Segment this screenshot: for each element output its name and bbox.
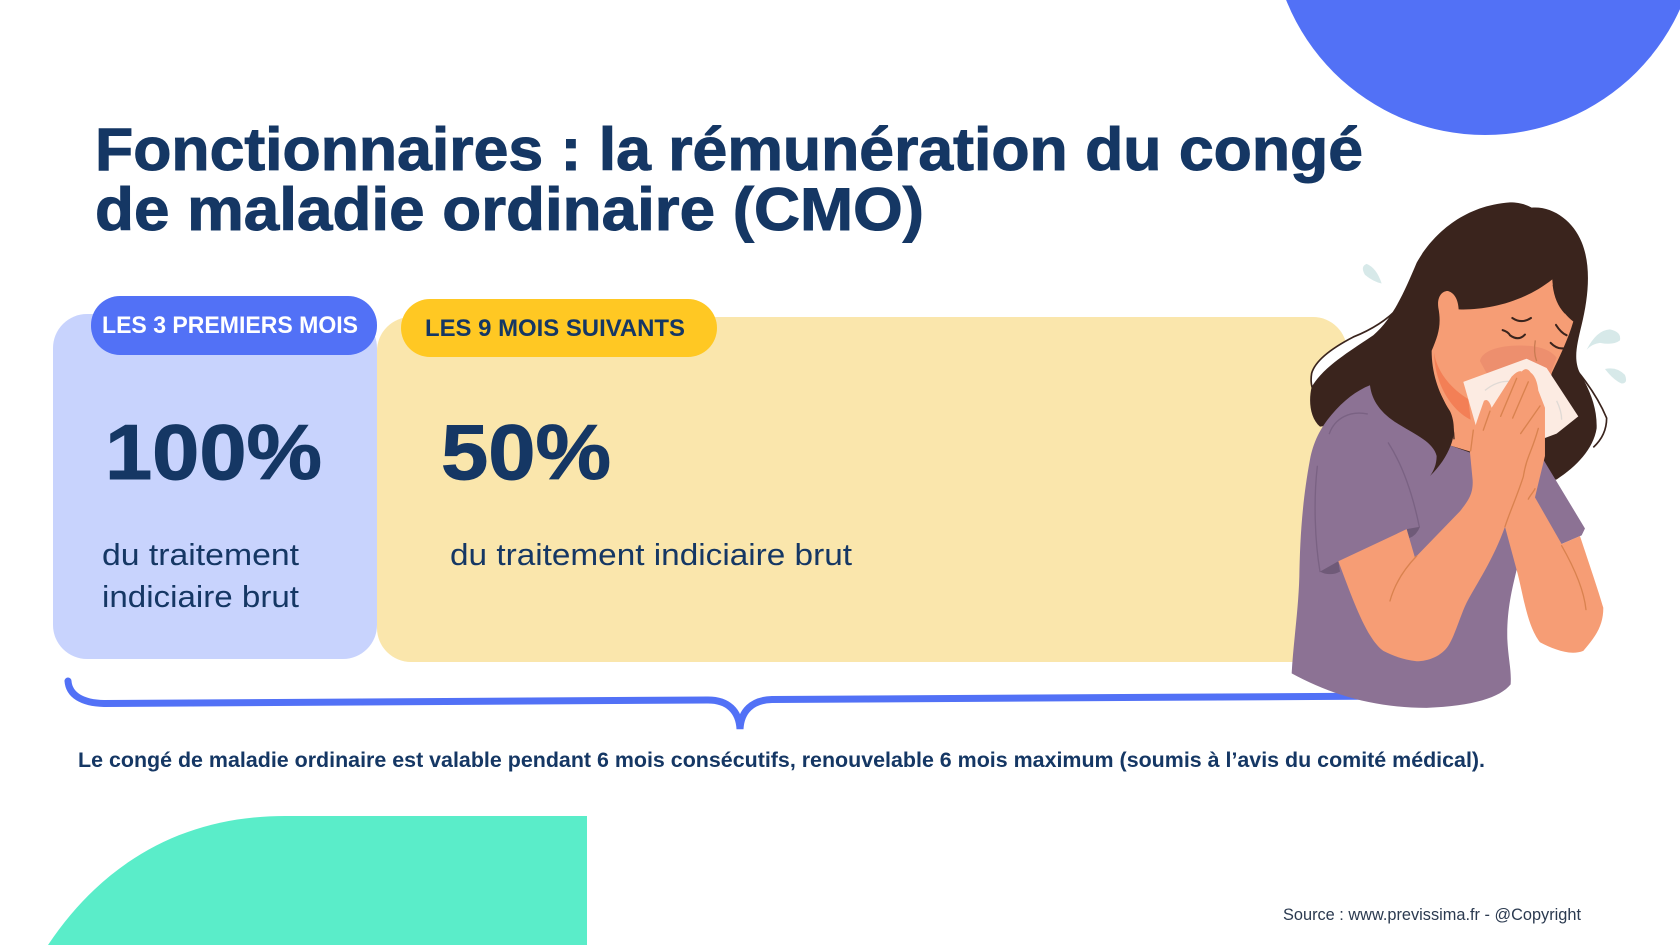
brace: [68, 681, 1400, 729]
tissue: [1463, 359, 1578, 438]
arms and hands: [1338, 369, 1603, 661]
hair wisps: [1311, 306, 1607, 447]
jaw shadow: [1434, 352, 1471, 420]
title: [95, 116, 1363, 243]
shirt: [1292, 385, 1585, 708]
panel: les 9 mois suivants: [377, 299, 1347, 662]
tear drops: [1363, 264, 1626, 384]
decorative blue circle top right: [1271, 0, 1680, 135]
illustration: woman blowing her nose: [1292, 202, 1626, 708]
blush: [1480, 346, 1557, 375]
footnote: Le congé de maladie ordinaire est valable pendant 6 mois consécutifs, renouvelable 6 mois maximum (soumis à l’avis du comité médical).: [78, 749, 1485, 772]
badge: les 9 mois suivants: LES 9 MOIS SUIVANTS: [425, 315, 685, 342]
badge: les 9 mois suivants: [401, 299, 717, 357]
percentage: 100%: 100%: [105, 408, 322, 496]
closed eyes: [1503, 318, 1567, 348]
title: Fonctionnaires : la rémunération du congé: [95, 116, 1363, 183]
description: 50%: du traitement indiciaire brut: [450, 537, 852, 572]
description: 100%: indiciaire brut: [102, 579, 299, 614]
hair: [1310, 202, 1597, 491]
panel: les 3 premiers mois: [53, 296, 377, 659]
decorative green shape bottom left: [48, 816, 587, 945]
title: de maladie ordinaire (CMO): [95, 176, 924, 243]
neck and face: [1432, 279, 1573, 453]
badge: les 3 premiers mois: LES 3 PREMIERS MOIS: [102, 312, 358, 339]
shirt folds: [1315, 413, 1420, 574]
description: 100%: du traitement: [102, 537, 299, 572]
source: Source : www.previssima.fr - @Copyright: [1283, 906, 1581, 924]
nose: [1535, 340, 1537, 361]
hair strands: [1429, 285, 1565, 439]
badge: les 3 premiers mois: [91, 296, 377, 355]
description: 100%: [102, 537, 299, 614]
percentage: 50%: 50%: [441, 408, 611, 496]
